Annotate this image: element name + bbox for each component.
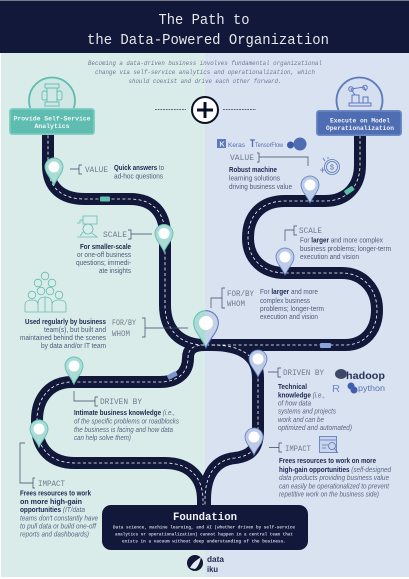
left impact callout: opportunities (IT/data bbox=[20, 507, 85, 514]
icon: dollar coin: $ bbox=[330, 164, 334, 172]
dataiku logo bbox=[187, 555, 225, 574]
foundation panel: exists in a vacuum without deep understanding of the business. bbox=[122, 538, 286, 544]
right impact callout: repetitive work on the business side) bbox=[279, 492, 379, 498]
left scale callout: or one-off business bbox=[77, 252, 132, 259]
left scale callout: SCALE bbox=[103, 230, 127, 240]
left impact callout: IMPACT bbox=[38, 479, 65, 489]
left impact callout: Frees resources to work bbox=[20, 490, 91, 498]
left impact callout: to pull data or build one-off bbox=[20, 524, 97, 530]
right scale callout: execution and vision bbox=[300, 254, 359, 261]
right for/by whom callout: execution and vision bbox=[260, 314, 318, 321]
logos: hadoop, R, python bbox=[332, 369, 385, 395]
right scale callout bbox=[285, 226, 391, 261]
left scale callout: For smaller-scale bbox=[80, 244, 131, 251]
intro text: Becoming a data-driven business involves fundamental organizational bbox=[88, 60, 322, 67]
left driven by callout: DRIVEN BY bbox=[100, 397, 142, 407]
left value callout: VALUE bbox=[85, 165, 108, 175]
foundation panel: Foundation bbox=[173, 512, 237, 524]
pin: center bbox=[194, 311, 218, 348]
right driven by callout bbox=[268, 368, 352, 432]
car: teal, upper left road bbox=[100, 196, 110, 202]
right value callout: VALUE bbox=[230, 153, 254, 163]
right for/by whom callout: FOR/BY bbox=[227, 289, 254, 299]
car: blue, left branch bbox=[167, 371, 178, 380]
icon: robot arm bbox=[349, 85, 371, 106]
left driven by callout bbox=[74, 391, 179, 442]
left for/by whom callout: by data and/or IT team bbox=[41, 343, 106, 350]
left for/by whom callout: maintained behind the scenes bbox=[20, 335, 107, 342]
car: blue, right road bbox=[320, 343, 331, 348]
background: operationalization side bbox=[205, 53, 409, 577]
left impact callout: teams don't constantly have bbox=[20, 516, 98, 522]
left scale callout bbox=[76, 230, 152, 275]
dataiku logo: data bbox=[207, 555, 225, 564]
left impact callout: on more high-gain bbox=[20, 499, 82, 506]
right for/by whom callout: For larger and more bbox=[260, 289, 318, 296]
right driven by callout: optimized and automated) bbox=[278, 425, 352, 432]
connector: right circle and sign: Execute on Model bbox=[330, 118, 390, 124]
foundation panel: Data science, machine learning, and AI (whether driven by self-service bbox=[113, 524, 295, 530]
logos: keras, tensorflow, spark: K bbox=[220, 142, 225, 148]
right impact callout: Frees resources to work on more bbox=[279, 458, 376, 465]
left driven by callout: of the specific problems or roadblocks bbox=[74, 418, 179, 426]
road network bbox=[37, 130, 377, 510]
left driven by callout: the business is facing and how data bbox=[74, 427, 173, 434]
right scale callout: business problems; longer-term bbox=[300, 246, 391, 253]
left impact callout: reports and dashboards) bbox=[20, 532, 89, 538]
icon: dollar coin bbox=[320, 157, 340, 174]
connector: right circle and sign: Operationalization bbox=[326, 125, 394, 132]
pin: left value bbox=[45, 158, 63, 185]
left value callout: ad-hoc questions bbox=[114, 174, 164, 180]
left driven by callout: can help solve them) bbox=[74, 435, 131, 442]
logos: hadoop, R, python: python bbox=[358, 384, 385, 393]
pin: right value bbox=[301, 176, 319, 203]
icon: scale chart and magnifier bbox=[77, 216, 97, 237]
connector: right circle and sign bbox=[317, 78, 401, 135]
left for/by whom callout bbox=[20, 318, 188, 350]
connector: left circle and sign: Analytics bbox=[34, 123, 70, 131]
left for/by whom callout: WHOM bbox=[112, 329, 130, 339]
title banner: the Data-Powered Organization bbox=[87, 32, 329, 49]
plus symbol bbox=[155, 97, 256, 123]
left value callout: Quick answers to bbox=[114, 165, 164, 172]
right driven by callout: work and can be bbox=[278, 417, 324, 424]
right impact callout: high-gain opportunities (self-designed bbox=[279, 467, 392, 474]
right value callout: Robust machine bbox=[229, 167, 277, 174]
icon: group of people bbox=[25, 272, 66, 312]
pin: left driven by bbox=[65, 357, 83, 384]
logos: hadoop, R, python: R bbox=[332, 384, 340, 395]
right for/by whom callout bbox=[211, 288, 324, 321]
intro text: should coexist and drive each other forward. bbox=[128, 78, 282, 85]
left scale callout: ate insights bbox=[99, 268, 132, 275]
right scale callout: SCALE bbox=[299, 226, 322, 236]
left for/by whom callout: FOR/BY bbox=[112, 318, 136, 328]
connector: left circle and sign bbox=[10, 78, 94, 134]
right driven by callout: DRIVEN BY bbox=[283, 368, 324, 378]
right driven by callout: knowledge (i.e., bbox=[278, 392, 325, 400]
left driven by callout: Intimate business knowledge (i.e., bbox=[74, 410, 175, 417]
dataiku logo: iku bbox=[207, 565, 218, 574]
title banner bbox=[0, 0, 409, 53]
left impact callout bbox=[20, 443, 98, 538]
pin: left impact bbox=[30, 420, 48, 447]
right value callout: learning solutions bbox=[229, 176, 281, 182]
foundation panel: analytics or operationalization) cannot happen in a central team that bbox=[115, 532, 293, 538]
logos: keras, tensorflow, spark: Keras bbox=[228, 142, 246, 149]
connector: left circle and sign: Provide Self-Service bbox=[14, 116, 90, 124]
title banner: The Path to bbox=[158, 12, 250, 29]
left value callout bbox=[70, 165, 164, 180]
right impact callout: IMPACT bbox=[285, 444, 311, 454]
intro text bbox=[88, 60, 322, 85]
background: self-service side bbox=[1, 53, 205, 577]
car: green, upper right road bbox=[344, 185, 355, 195]
left for/by whom callout: Used regularly by business bbox=[25, 319, 106, 326]
foundation panel bbox=[102, 505, 308, 550]
right value callout bbox=[229, 153, 308, 191]
left for/by whom callout: team(s), but built and bbox=[44, 327, 106, 334]
pin: right scale bbox=[276, 248, 294, 275]
right driven by callout: Technical bbox=[278, 384, 307, 391]
pin: left scale bbox=[155, 224, 173, 252]
right value callout: driving business value bbox=[229, 184, 292, 191]
pin: right driven by bbox=[249, 350, 267, 377]
right impact callout bbox=[269, 443, 392, 498]
right for/by whom callout: problems; longer-term bbox=[260, 306, 324, 313]
logos: keras, tensorflow, spark: TensorFlow bbox=[255, 142, 283, 149]
left scale callout: questions; immedi- bbox=[76, 260, 131, 267]
logos: keras, tensorflow, spark bbox=[217, 138, 306, 150]
right for/by whom callout: complex business bbox=[260, 298, 310, 305]
right impact callout: can easily be operationalized to prevent bbox=[279, 484, 390, 490]
right scale callout: For larger and more complex bbox=[300, 238, 384, 244]
intro text: change via self-service analytics and operationalization, which bbox=[95, 69, 315, 76]
right impact callout: data products providing business value bbox=[279, 475, 389, 482]
right driven by callout: of how data bbox=[278, 400, 311, 408]
pin: right impact bbox=[245, 428, 263, 455]
icon: window with magnifier bbox=[320, 436, 338, 453]
logos: hadoop, R, python: hadoop bbox=[346, 371, 385, 382]
icon: self-service kiosk bbox=[42, 84, 62, 106]
right driven by callout: systems and projects bbox=[278, 408, 336, 416]
right for/by whom callout: WHOM bbox=[227, 299, 245, 309]
